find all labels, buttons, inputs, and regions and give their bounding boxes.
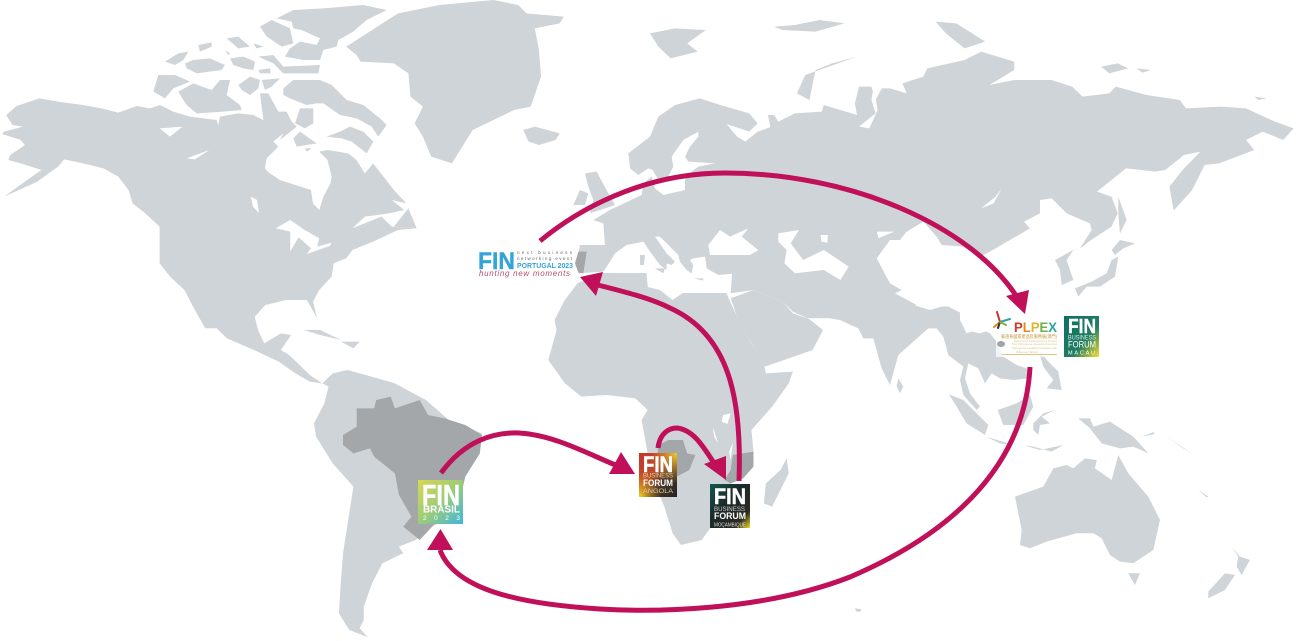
logo: FIN Business Forum Mocambique: FIN — [714, 484, 746, 509]
logo: FIN Portugal 2023: hunting new moments — [479, 269, 570, 278]
land: Japan, Korea, Sakhalin — [1055, 197, 1135, 297]
icon: PLPEX star — [994, 312, 1010, 328]
arrow: Mozambique to Portugal — [580, 272, 739, 481]
logo: PLPEX: from Portuguese-speaking Countries — [1012, 343, 1058, 346]
logo: FIN Portugal 2023: next business — [517, 250, 573, 255]
logo: FIN Portugal 2023: FIN — [478, 248, 515, 275]
arrow: Angola to Mozambique — [658, 428, 726, 480]
land: Arctic islands of Eurasia — [650, 20, 1267, 100]
logo: FIN Brasil 2023: BRASIL — [423, 504, 460, 516]
logo: FIN Business Forum Angola: FIN — [643, 452, 673, 477]
logo: FIN Business Forum Angola: ANGOLA — [643, 489, 673, 495]
logo: FIN Business Forum Mocambique: MOÇAMBIQUE — [714, 522, 747, 528]
land: Southeast Asian islands and Oceania — [855, 350, 1250, 612]
highlighted countries — [343, 252, 753, 540]
land: northern and western Asia — [731, 52, 1294, 367]
land: Central and South America, Africa, Madagascar — [204, 273, 793, 637]
logo: PLPEX — [994, 312, 1058, 357]
logo: FIN Business Forum Macau — [1064, 316, 1099, 357]
logo: FIN Business Forum Macau: MACAU — [1068, 350, 1095, 356]
logo: FIN Brasil 2023 — [418, 480, 463, 524]
arrow: Brasil to Angola — [441, 433, 635, 474]
logo: FIN Business Forum Macau: FIN — [1068, 316, 1096, 338]
country: Angola — [656, 440, 695, 477]
land: Europe and British Isles — [573, 98, 827, 281]
logo: PLPEX: 葡語系國家產品及服務展(澳門) — [1001, 333, 1057, 340]
land: North America, Greenland, Iceland — [2, 0, 564, 328]
logo: PLPEX: Portuguese-speaking Countries Fair — [1012, 347, 1057, 350]
logo: FIN Business Forum Angola — [639, 452, 677, 497]
logo: FIN Brasil 2023: 2023 — [423, 515, 460, 522]
logo: FIN Business Forum Mocambique: BUSINESS — [714, 506, 746, 513]
logo: FIN Business Forum Mocambique — [710, 484, 750, 528]
logo: FIN Business Forum Macau: BUSINESS — [1068, 334, 1097, 342]
logo: PLPEX: Macao Import and Export Fair of Products — [1014, 340, 1058, 343]
logo: FIN Business Forum Angola: FORUM — [643, 478, 673, 488]
inland water — [160, 87, 1002, 460]
country: Mozambique — [724, 452, 753, 483]
arrow: Macau to Brasil — [427, 367, 1030, 610]
arrow: Portugal to Macau — [540, 173, 1029, 314]
logo: FIN Portugal 2023 — [478, 248, 573, 278]
logo: FIN Portugal 2023: PORTUGAL 2023 — [517, 263, 573, 270]
area left blank: China — [877, 198, 1092, 333]
logo: FIN Portugal 2023: networking event — [517, 256, 573, 261]
logo: FIN Business Forum Mocambique: FORUM — [714, 511, 746, 521]
logo: FIN Brasil 2023: FIN — [422, 480, 460, 512]
land: Canadian Arctic — [150, 5, 387, 193]
land: South Asia — [800, 300, 1028, 410]
wordmark: PLPEX: PLPEX — [1014, 319, 1058, 335]
country: Portugal — [575, 252, 587, 273]
country: Brazil — [343, 397, 482, 540]
logo: PLPEX: (Macao) Expo — [1016, 351, 1039, 354]
logo: FIN Business Forum Macau: FORUM — [1068, 340, 1096, 350]
logo: FIN Business Forum Angola: BUSINESS — [643, 474, 673, 480]
